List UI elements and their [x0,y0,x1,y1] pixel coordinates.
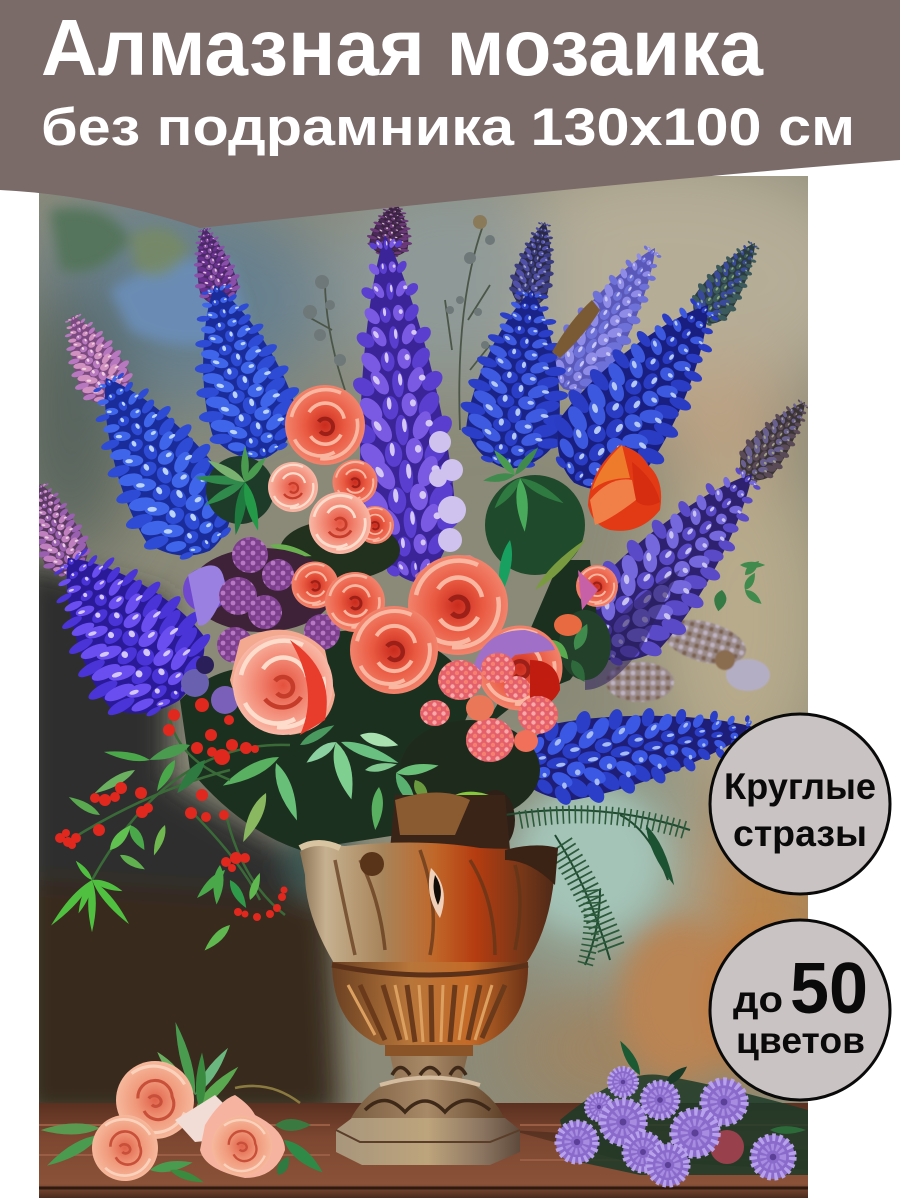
brown seed spray [552,300,600,358]
purple asters [556,1039,808,1186]
rose bouquet [230,385,618,735]
vase foot [336,1118,520,1165]
spire: upper right blue [556,298,719,488]
right hanging fern branch [505,810,690,965]
orange tulip [588,445,661,531]
vase [300,792,558,1165]
vase neck [390,795,510,850]
spire: centre right blue [460,290,568,468]
spire tips [14,199,824,584]
badge: round rhinestones [710,714,890,894]
painting: flower bouquet in a vase [39,176,808,1198]
subtitle: без подрамника 130х100 см [41,98,855,157]
dark violet shade [585,570,680,690]
right dried bloom sprays [606,612,770,702]
spire: right violet [596,468,760,666]
painting background [39,176,808,1103]
vase stem [350,1056,504,1119]
central foliage [180,456,611,850]
left branch with red berries [48,698,290,954]
spire: upper left blue [194,284,300,460]
spire: left blue [93,372,231,560]
vase ribbed bowl [332,962,528,1045]
spire: centre purple [353,235,458,582]
table [39,1103,808,1198]
badge: round rhinestones: стразы [733,813,867,854]
spire: lilac sprig [555,246,662,393]
fallen pink roses [40,1021,326,1186]
badge: up to 50 colours: цветов [736,1020,865,1061]
pink spray [420,614,582,762]
header banner [0,0,900,228]
badge: up to 50 colours: до [733,979,783,1020]
pale lilac spray near centre [429,431,466,552]
berry cluster mauve [181,537,340,714]
badge: round rhinestones: Круглые [724,766,876,807]
thin dried sprigs [303,215,495,430]
spire: lower right blue [534,708,752,805]
lupin spires [11,199,824,817]
vase body [300,842,558,965]
badge: up to 50 colours: 50 [790,949,868,1029]
badge: up to 50 colours [710,920,890,1100]
title: Алмазная мозаика [41,3,763,92]
green leaves [194,445,765,868]
spire: lower left violet [54,548,210,716]
